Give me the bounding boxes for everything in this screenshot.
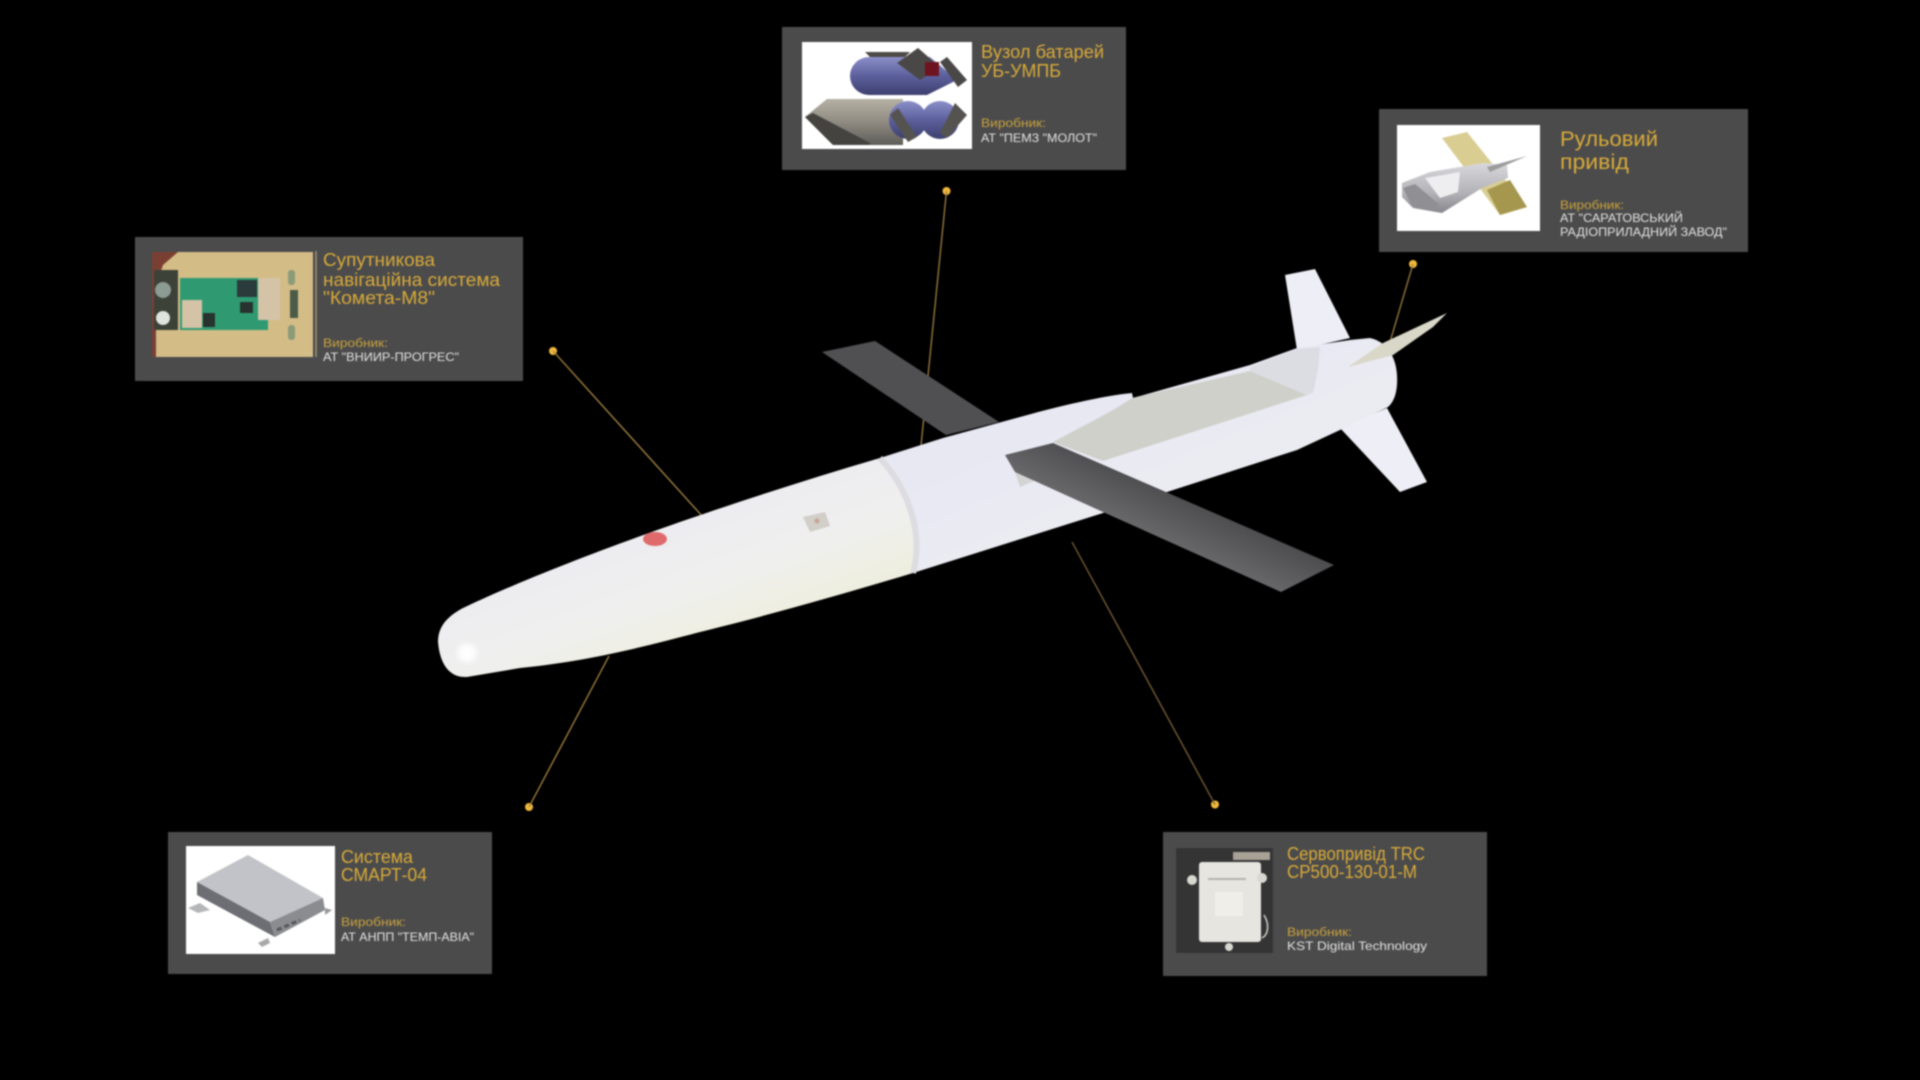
- panel: servo drive: [1163, 832, 1487, 976]
- heading: Рульовий: [1560, 128, 1658, 151]
- manufacturer name: АТ "ПЕМЗ "МОЛОТ": [981, 131, 1097, 145]
- panel background: [1379, 109, 1748, 252]
- heading: СР500-130-01-М: [1287, 862, 1417, 882]
- manufacturer label: Виробник:: [1560, 198, 1624, 212]
- rear fairing section: [1250, 347, 1320, 395]
- nose highlight: [454, 640, 480, 666]
- manufacturer name: АТ "ВНИИР-ПРОГРЕС": [323, 350, 459, 364]
- heading: Супутникова: [323, 250, 436, 270]
- heading: [1560, 128, 1658, 174]
- manufacturer name: РАДІОПРИЛАДНИЙ ЗАВОД": [1560, 224, 1727, 239]
- leader line: battery unit: [921, 187, 950, 446]
- panel: steering actuator: [1379, 109, 1748, 252]
- image: circuit board: [152, 252, 313, 357]
- heading: навігаційна система: [323, 270, 501, 290]
- heading: Вузол батарей: [981, 42, 1104, 62]
- panel background: [1163, 832, 1487, 976]
- missile rear section: [880, 338, 1397, 573]
- panel background: [782, 27, 1126, 170]
- leader line: navigation system: [549, 347, 703, 517]
- dorsal fairing: [1053, 371, 1307, 461]
- heading: [1287, 844, 1425, 882]
- image: electronics box: [186, 846, 335, 954]
- red sensor mark: [643, 532, 667, 546]
- heading: [981, 42, 1104, 81]
- fuselage seam: [880, 458, 917, 573]
- manufacturer name: [1560, 210, 1727, 239]
- thin rear fin: [1348, 313, 1447, 367]
- heading: привід: [1560, 151, 1629, 174]
- heading: [323, 250, 501, 308]
- heading: Система: [341, 847, 414, 867]
- image divider: [315, 251, 317, 357]
- manufacturer label: Виробник:: [341, 915, 406, 929]
- heading: СМАРТ-04: [341, 865, 427, 885]
- heading: "Комета-М8": [323, 288, 435, 308]
- panel background: [135, 237, 523, 381]
- image: actuator: [1397, 125, 1540, 231]
- panel: SMART-04 system: [168, 832, 492, 974]
- upper tail fin: [1285, 269, 1350, 350]
- heading: УБ-УМПБ: [981, 61, 1061, 81]
- panel: battery unit: [782, 27, 1126, 170]
- image: batteries: [802, 42, 972, 149]
- heading: [341, 847, 427, 885]
- manufacturer label: Виробник:: [1287, 925, 1352, 939]
- manufacturer name: KST Digital Technology: [1287, 939, 1427, 953]
- manufacturer name: АТ АНПП "ТЕМП-АВІА": [341, 930, 474, 944]
- small square hatch: [803, 512, 830, 532]
- leader line: steering actuator: [1390, 260, 1417, 342]
- lower tail fin: [1340, 408, 1427, 492]
- leader line: servo drive: [1072, 542, 1219, 808]
- manufacturer name: АТ "САРАТОВСЬКИЙ: [1560, 210, 1683, 225]
- lower wing: [1005, 443, 1334, 592]
- upper wing: [822, 341, 999, 435]
- heading: Сервопривід TRC: [1287, 844, 1425, 864]
- missile nose section: [438, 458, 917, 677]
- panel: satellite navigation system: [135, 237, 523, 381]
- leader line: SMART-04 system: [525, 656, 609, 811]
- image: servo module: [1176, 848, 1273, 953]
- panel background: [168, 832, 492, 974]
- manufacturer label: Виробник:: [981, 116, 1046, 130]
- manufacturer label: Виробник:: [323, 336, 388, 350]
- missile: [438, 269, 1447, 677]
- wing root patch: [1015, 472, 1036, 487]
